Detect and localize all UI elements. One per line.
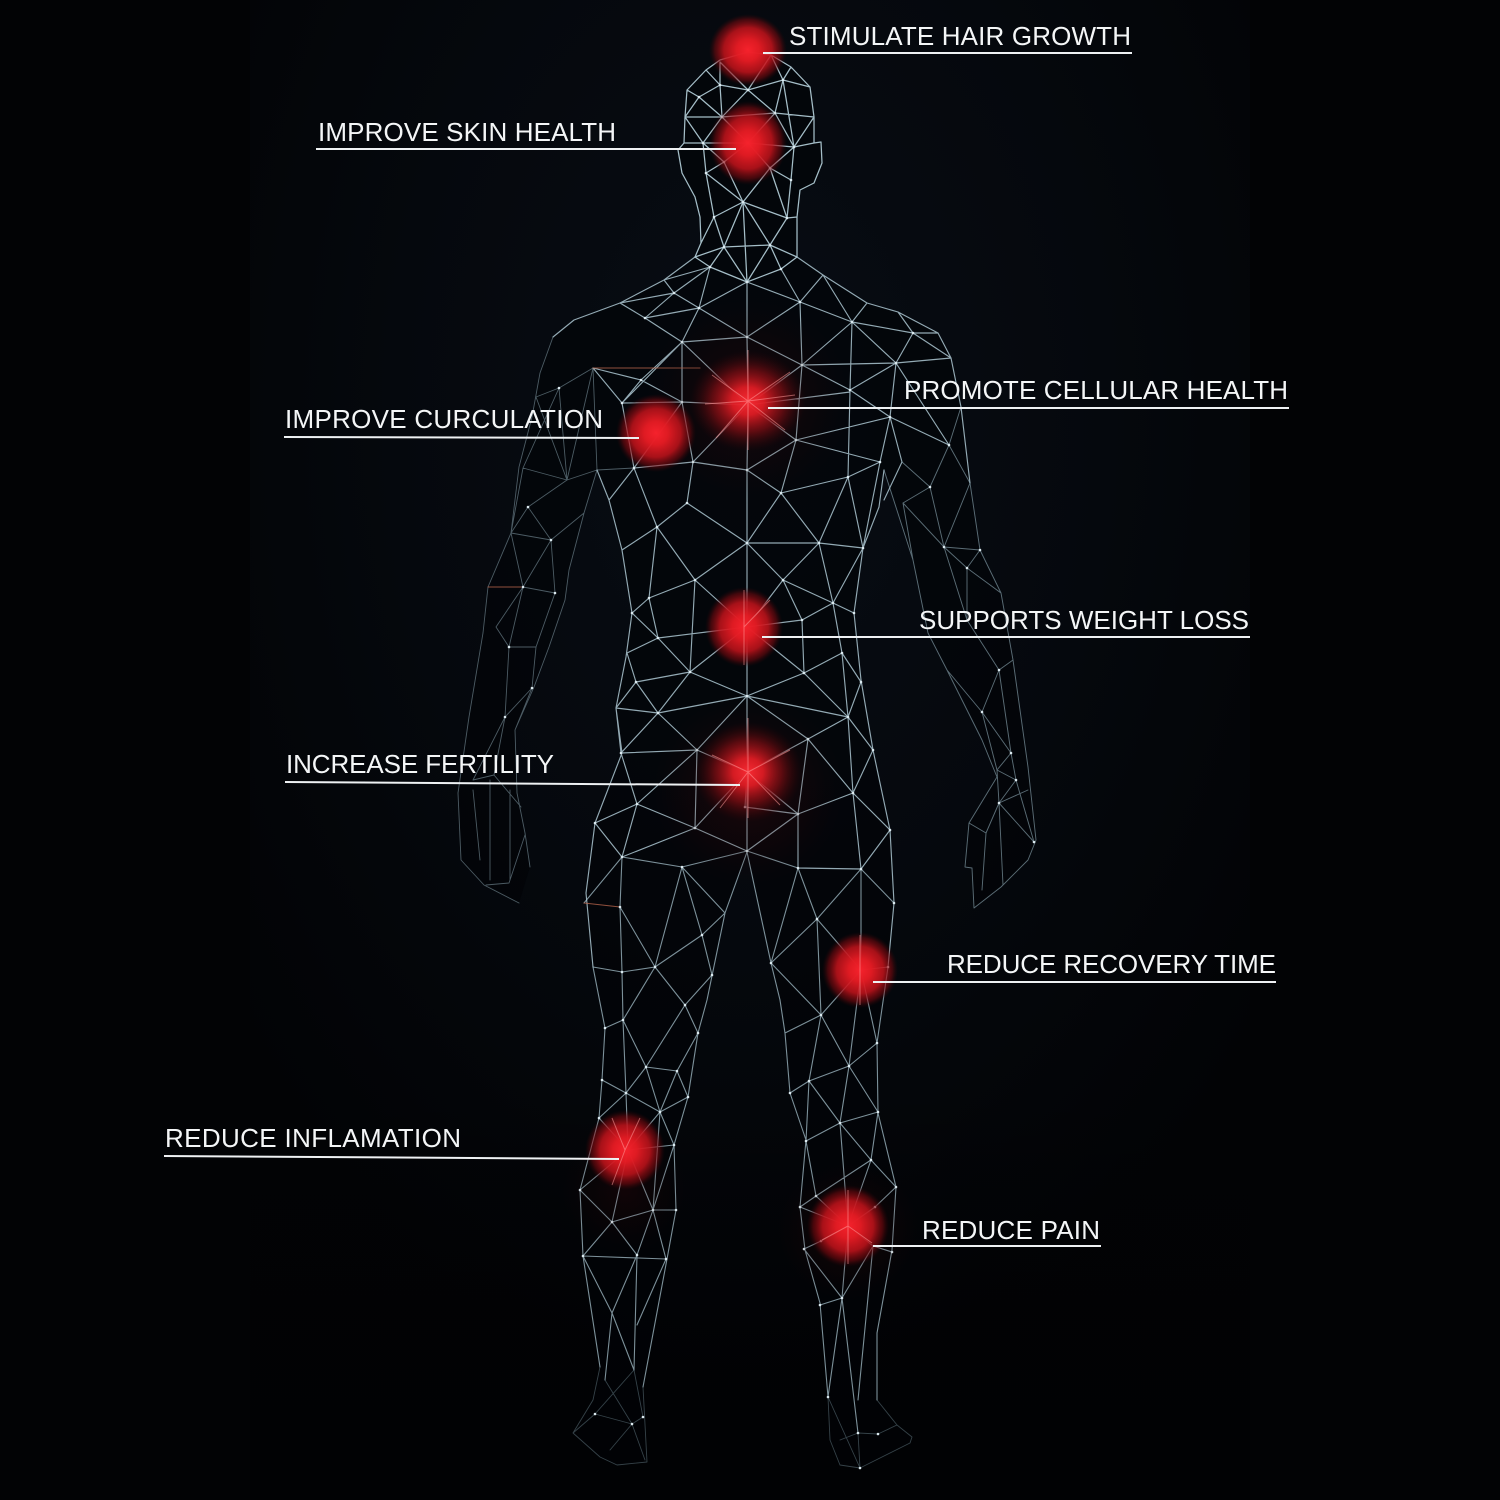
callout: supports weight loss: SUPPORTS WEIGHT LOSS: [919, 605, 1249, 635]
callout: reduce inflammation: [164, 1123, 619, 1159]
red light point: pelvis: [694, 722, 802, 822]
left arm mesh: [458, 337, 634, 903]
body silhouette fill: [458, 52, 1036, 1468]
torso mesh: [553, 257, 970, 967]
callout: reduce inflammation: REDUCE INFLAMATION: [165, 1123, 461, 1153]
callout: increase fertility: INCREASE FERTILITY: [286, 749, 554, 779]
shadow halos around red points: [563, 300, 918, 1300]
callout: stimulate hair growth: STIMULATE HAIR GROWTH: [789, 21, 1131, 51]
red light point: head top: [709, 14, 787, 86]
red light point: left calf: [807, 1185, 889, 1267]
red light point: chest: [690, 351, 806, 451]
feet mesh: [573, 1367, 912, 1468]
leg mesh: [580, 851, 896, 1433]
faint orange accents: [488, 368, 700, 907]
right arm mesh: [884, 407, 1036, 908]
callout: reduce recovery time: REDUCE RECOVERY TIME: [947, 949, 1276, 979]
callout: increase fertility: [285, 749, 740, 785]
red light point: face: [709, 101, 787, 185]
callout: improve circulation: IMPROVE CURCULATION: [285, 404, 603, 434]
mesh nodes: [505, 80, 1034, 1468]
red light point: right knee: [585, 1110, 665, 1190]
human body wireframe: [458, 52, 1036, 1468]
light rays over red points: [612, 350, 872, 1264]
red light point: thigh: [822, 932, 898, 1008]
red light point: stomach: [705, 587, 783, 667]
head and neck mesh: [678, 52, 822, 282]
red light point: shoulder: [616, 394, 696, 472]
callout: improve skin health: IMPROVE SKIN HEALTH: [318, 117, 616, 147]
callout: reduce pain: REDUCE PAIN: [922, 1215, 1100, 1245]
callout: promote cellular health: PROMOTE CELLULAR HEALTH: [904, 375, 1288, 405]
